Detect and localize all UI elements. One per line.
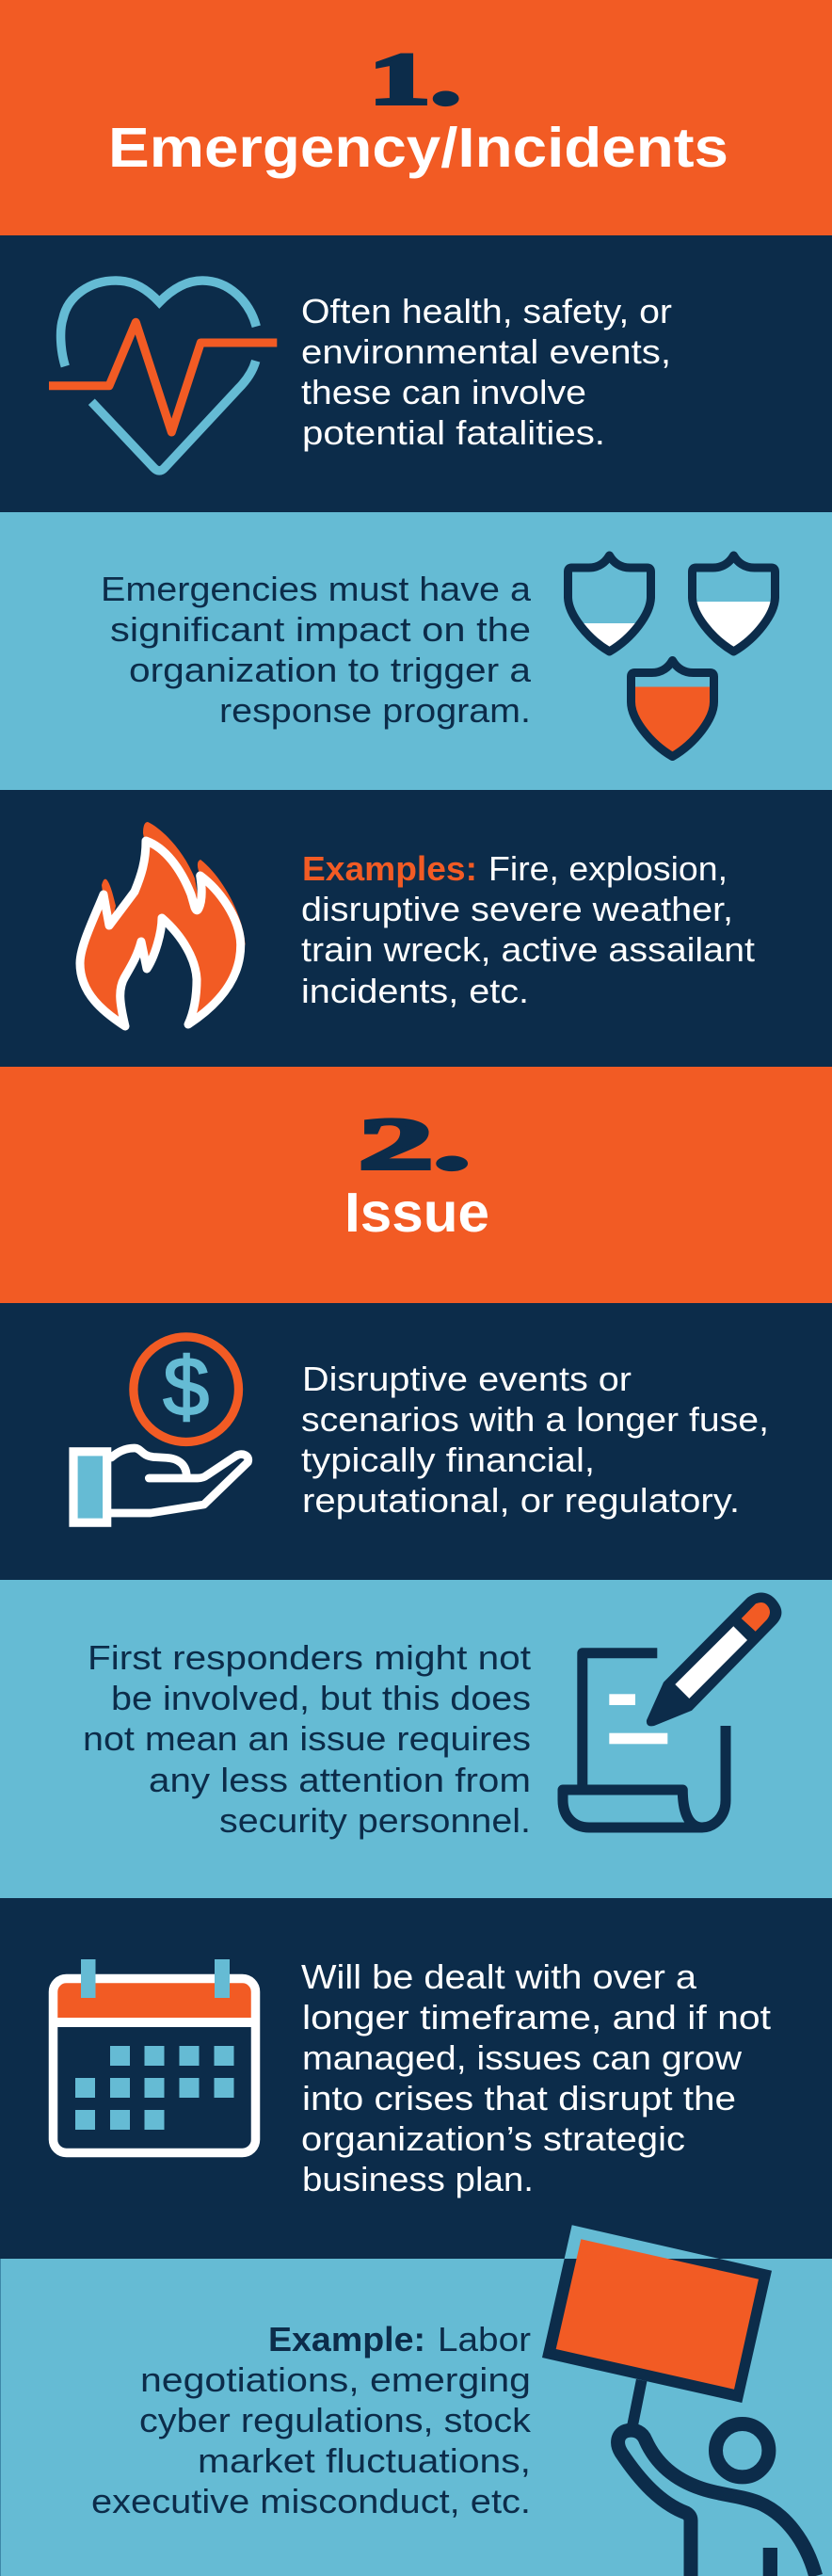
text: emergency impact: response program.: [219, 691, 531, 730]
panel: issue timeframe: [0, 1898, 832, 2259]
text: issue timeframe: Will be dealt with over a: [301, 1957, 697, 1996]
text: issue definition: scenarios with a longer fuse,: [301, 1400, 769, 1439]
text: issue attention: any less attention from: [149, 1761, 531, 1799]
text: issue example: Example:: [268, 2320, 425, 2359]
section number 2: 2.: [359, 1103, 471, 1184]
icon: document and pen: [563, 1592, 781, 1827]
text: issue definition: typically financial,: [301, 1441, 595, 1479]
text: emergency examples: disruptive severe weather,: [301, 890, 733, 928]
panel: issue attention: [0, 1580, 832, 1898]
text: issue timeframe: into crises that disrupt the: [302, 2079, 736, 2117]
text: issue timeframe: longer timeframe, and if not: [302, 1998, 771, 2037]
icon: hand holding coin: [73, 1337, 248, 1522]
panel: section 2 header: [0, 1067, 832, 1303]
text: issue timeframe: business plan.: [302, 2160, 534, 2198]
text: emergency definition: these can involve: [301, 373, 586, 411]
icon: person holding protest sign: [542, 2225, 816, 2576]
text: issue example: negotiations, emerging: [140, 2360, 531, 2399]
text: issue attention: First responders might not: [88, 1638, 531, 1677]
panel: issue definition: [0, 1303, 832, 1580]
text: issue timeframe: organization’s strategic: [301, 2119, 685, 2158]
section number 1: 1.: [369, 38, 461, 120]
panel: issue example: [0, 2225, 832, 2576]
heading: Emergency/Incidents: Emergency/Incidents: [108, 117, 728, 179]
icon: calendar: [53, 1959, 256, 2152]
text: emergency impact: Emergencies must have a: [101, 570, 532, 608]
text: issue attention: [83, 1638, 531, 1840]
panel: emergency impact: [0, 512, 832, 790]
text: emergency examples: Examples:: [302, 849, 477, 888]
text: emergency definition: [301, 292, 672, 452]
text: emergency impact: significant impact on the: [110, 610, 531, 649]
text: emergency examples: train wreck, active assailant: [301, 930, 755, 969]
text: emergency impact: [101, 570, 532, 730]
panel: emergency definition: [0, 235, 832, 512]
icon: hand holding coin: $: [163, 1340, 209, 1433]
text: emergency impact: organization to trigger a: [129, 651, 532, 689]
text: issue timeframe: [301, 1957, 771, 2198]
text: issue definition: reputational, or regulatory.: [302, 1481, 740, 1520]
text: emergency examples: incidents, etc.: [301, 972, 529, 1010]
icon: flame: [80, 822, 245, 1026]
text: issue example: cyber regulations, stock: [139, 2401, 532, 2439]
icon: shield with low white fill: [563, 555, 657, 661]
text: emergency definition: environmental events,: [301, 332, 671, 371]
text: issue attention: be involved, but this does: [111, 1679, 531, 1717]
text: emergency definition: Often health, safety, or: [301, 292, 672, 330]
text: emergency definition: potential fatalities.: [302, 413, 605, 452]
text: issue attention: not mean an issue requires: [83, 1719, 531, 1758]
text: issue attention: security personnel.: [219, 1801, 531, 1840]
panel: emergency examples: [0, 790, 832, 1067]
text: issue definition: [301, 1360, 769, 1520]
icon: shield with medium white fill: [687, 555, 781, 661]
panel: section 1 header: [0, 0, 832, 235]
icon: heart with pulse line: [49, 281, 277, 471]
text: emergency examples: [301, 849, 755, 1010]
text: issue timeframe: managed, issues can grow: [302, 2038, 743, 2077]
icon: shield with orange fill: [625, 661, 719, 766]
text: issue example: executive misconduct, etc.: [91, 2482, 531, 2520]
text: issue example: [91, 2320, 532, 2520]
text: issue example: Labor: [438, 2320, 531, 2359]
heading: Issue: Issue: [344, 1182, 489, 1244]
text: issue definition: Disruptive events or: [302, 1360, 632, 1398]
text: emergency examples: Fire, explosion,: [488, 849, 728, 888]
text: issue example: market fluctuations,: [198, 2441, 531, 2480]
